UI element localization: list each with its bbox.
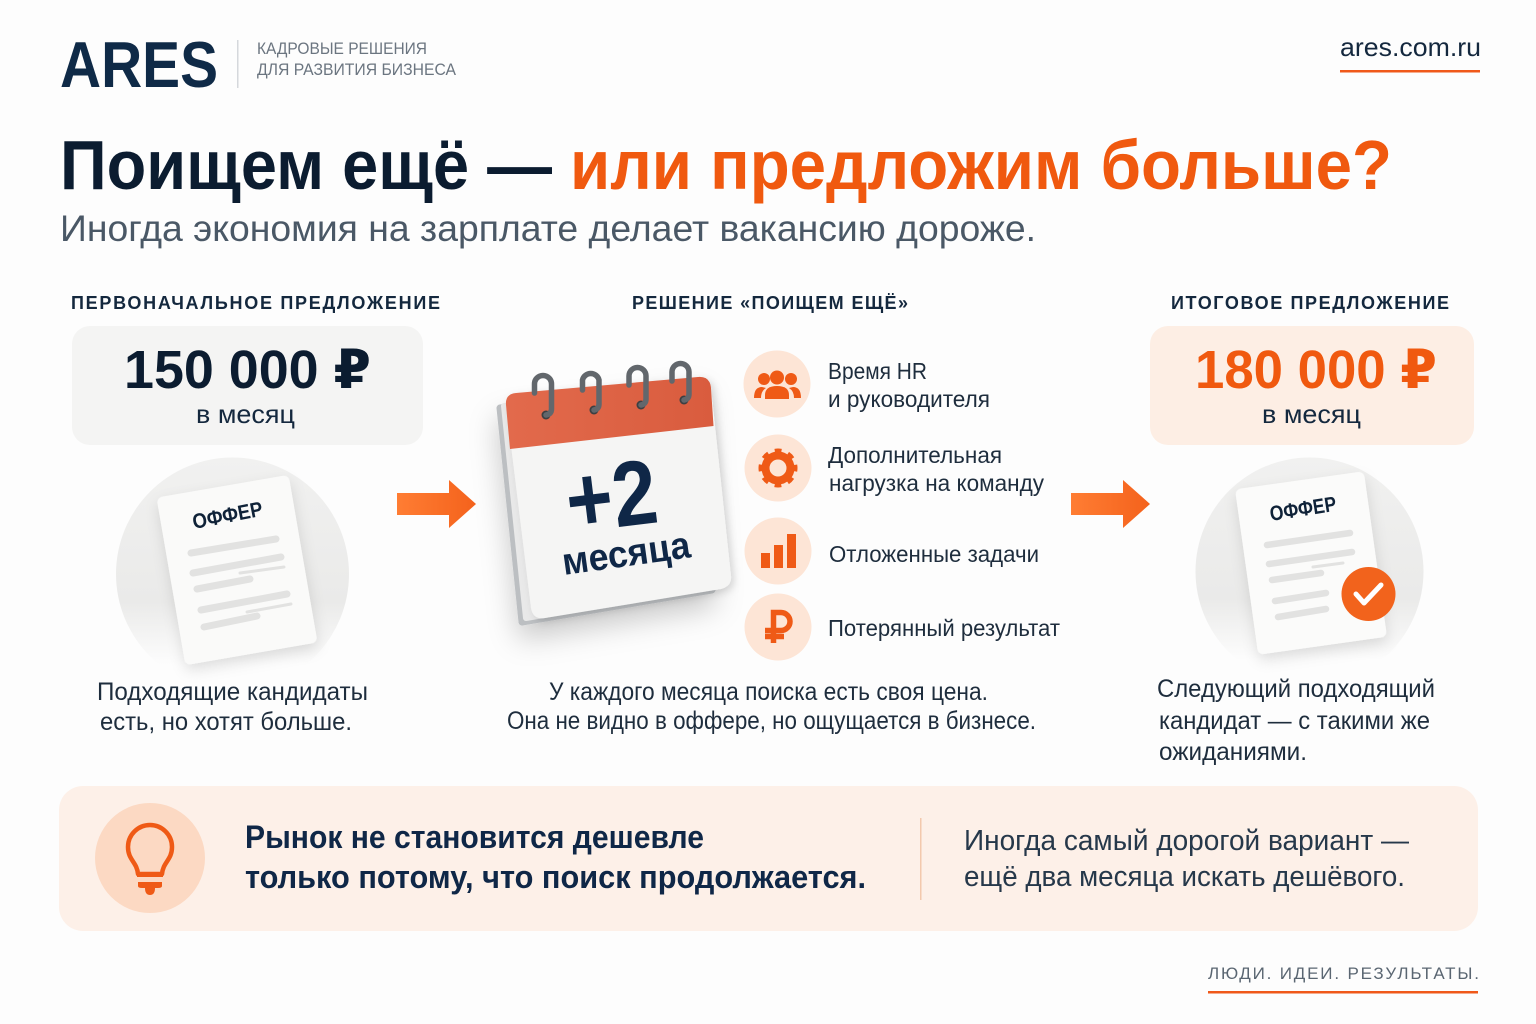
- heading: final offer: ИТОГОВОЕ ПРЕДЛОЖЕНИЕ: [1171, 293, 1449, 313]
- panel: final offer: [1150, 293, 1474, 766]
- item: lost result: Потерянный результат: [828, 615, 1060, 641]
- calendar front page: [506, 377, 731, 618]
- caption: decision: Она не видно в оффере, но ощущается в бизнесе.: [507, 707, 1036, 735]
- calendar back pages: [500, 382, 716, 622]
- item: HR time: Время HR: [828, 358, 927, 384]
- takeaway headline: [245, 819, 866, 895]
- icon: check badge: [1342, 567, 1396, 621]
- subtitle: Иногда экономия на зарплате делает вакансию дороже.: [60, 208, 1036, 249]
- item: delayed tasks: [744, 518, 1039, 584]
- title: Поищем ещё —: [60, 126, 552, 204]
- header logo: [60, 28, 457, 101]
- icon: offer document: ОФФЕР: [191, 498, 265, 534]
- panel: initial offer: [71, 293, 440, 736]
- arrow: to decision: [397, 480, 476, 528]
- item: extra team load: [744, 434, 1044, 502]
- caption: decision: [507, 678, 1036, 735]
- caption: initial offer: есть, но хотят больше.: [100, 708, 352, 736]
- heading: decision: РЕШЕНИЕ «ПОИЩЕМ ЕЩЁ»: [632, 293, 908, 313]
- list: hidden costs: [744, 350, 1060, 660]
- price card: 180 000: 180 000 ₽: [1195, 340, 1437, 400]
- caption: final offer: кандидат — с такими же: [1159, 707, 1430, 735]
- title: или предложим больше?: [570, 126, 1392, 204]
- caption: final offer: Следующий подходящий: [1157, 675, 1435, 703]
- caption: initial offer: Подходящие кандидаты: [97, 678, 368, 706]
- item: delayed tasks: Отложенные задачи: [829, 541, 1039, 567]
- calendar word: месяца: [559, 524, 694, 584]
- price card: 150 000: 150 000 ₽: [124, 340, 371, 400]
- logo tagline: ДЛЯ РАЗВИТИЯ БИЗНЕСА: [257, 60, 457, 79]
- arrow: to final offer: [1071, 480, 1150, 528]
- item: HR time: и руководителя: [828, 386, 990, 412]
- price card: 180 000: в месяц: [1262, 399, 1361, 429]
- panel: takeaway: [59, 786, 1478, 931]
- caption: decision: У каждого месяца поиска есть своя цена.: [549, 678, 988, 706]
- item: HR time: [744, 350, 990, 418]
- takeaway note: Иногда самый дорогой вариант —: [964, 825, 1409, 857]
- caption: final offer: ожиданиями.: [1159, 738, 1307, 766]
- icon: approved offer document: [1196, 458, 1424, 686]
- item: lost result: [744, 594, 1060, 660]
- takeaway note: [964, 825, 1409, 893]
- title: [60, 126, 1392, 204]
- calendar red header: [506, 377, 714, 449]
- icon: light bulb: [95, 803, 205, 913]
- takeaway note: ещё два месяца искать дешёвого.: [964, 861, 1405, 893]
- heading: initial offer: ПЕРВОНАЧАЛЬНОЕ ПРЕДЛОЖЕНИЕ: [71, 293, 440, 313]
- calendar +2 months: [500, 364, 731, 622]
- takeaway headline: Рынок не становится дешевле: [245, 819, 704, 855]
- icon: offer document: [116, 458, 349, 690]
- item: extra team load: нагрузка на команду: [829, 470, 1044, 496]
- caption: initial offer: [97, 678, 368, 736]
- takeaway headline: только потому, что поиск продолжается.: [245, 859, 866, 895]
- footer slogan: ЛЮДИ. ИДЕИ. РЕЗУЛЬТАТЫ.: [1208, 964, 1479, 983]
- caption: final offer: [1157, 675, 1435, 766]
- price card: 150 000: в месяц: [196, 399, 295, 429]
- logo tagline: [257, 39, 457, 79]
- price card: 150 000: [72, 326, 423, 445]
- item: extra team load: Дополнительная: [828, 442, 1002, 468]
- price card: 180 000: [1150, 326, 1474, 445]
- calendar number: +2: [560, 441, 663, 553]
- logo wordmark: ARES: [60, 28, 218, 101]
- calendar rings: [534, 364, 689, 420]
- logo tagline: КАДРОВЫЕ РЕШЕНИЯ: [257, 39, 427, 58]
- website link: ares.com.ru: [1340, 32, 1481, 62]
- icon: approved offer document: ОФФЕР: [1268, 493, 1338, 526]
